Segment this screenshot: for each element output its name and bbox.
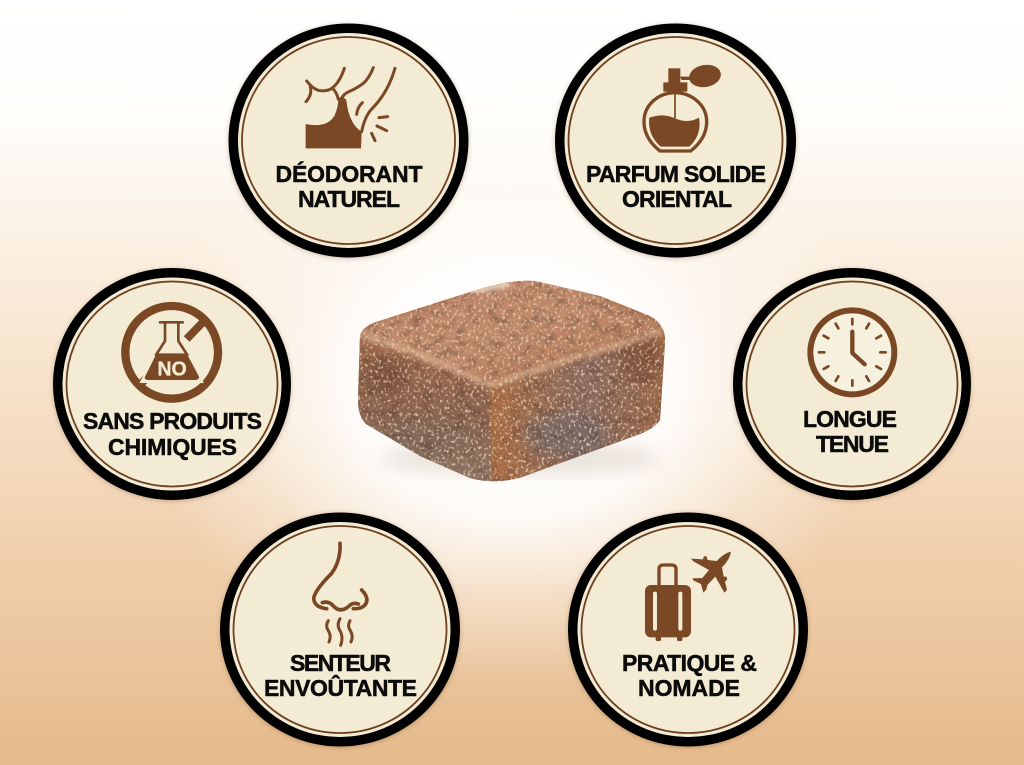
badge: parfum solide oriental bbox=[555, 24, 796, 258]
icon: clock bbox=[810, 310, 894, 394]
badge: pratique et nomade bbox=[568, 512, 808, 746]
label: PRATIQUE & bbox=[622, 650, 757, 676]
label bbox=[803, 406, 897, 457]
label bbox=[276, 160, 422, 212]
label: SENTEUR bbox=[290, 650, 391, 676]
label bbox=[264, 650, 417, 701]
label: TENUE bbox=[816, 431, 889, 457]
badge: longue tenue bbox=[733, 268, 971, 500]
label: ORIENTAL bbox=[622, 186, 732, 212]
label: LONGUE bbox=[803, 406, 897, 432]
central product: amber cube bbox=[358, 280, 666, 482]
badge: déodorant naturel bbox=[228, 24, 468, 258]
icon: nose with scent bbox=[314, 543, 367, 645]
label: NOMADE bbox=[638, 675, 740, 701]
label bbox=[586, 161, 766, 212]
label: SANS PRODUITS bbox=[83, 408, 262, 434]
icon: armpit bbox=[306, 68, 395, 148]
label: PARFUM SOLIDE bbox=[586, 161, 766, 187]
label bbox=[622, 650, 757, 701]
icon: perfume bottle bbox=[644, 62, 723, 151]
label: ENVOÛTANTE bbox=[264, 674, 417, 701]
label bbox=[83, 408, 262, 460]
cube shadow bbox=[380, 440, 660, 476]
badge: senteur envoûtante bbox=[220, 512, 460, 746]
icon: suitcase and plane bbox=[645, 552, 731, 641]
icon: crossed-out flask bbox=[125, 306, 218, 399]
icon: crossed-out flask: NO bbox=[157, 358, 187, 381]
label: NATUREL bbox=[298, 186, 400, 212]
label: DÉODORANT bbox=[276, 160, 422, 187]
label: CHIMIQUES bbox=[108, 434, 237, 460]
badge: sans produits chimiques bbox=[53, 268, 291, 500]
